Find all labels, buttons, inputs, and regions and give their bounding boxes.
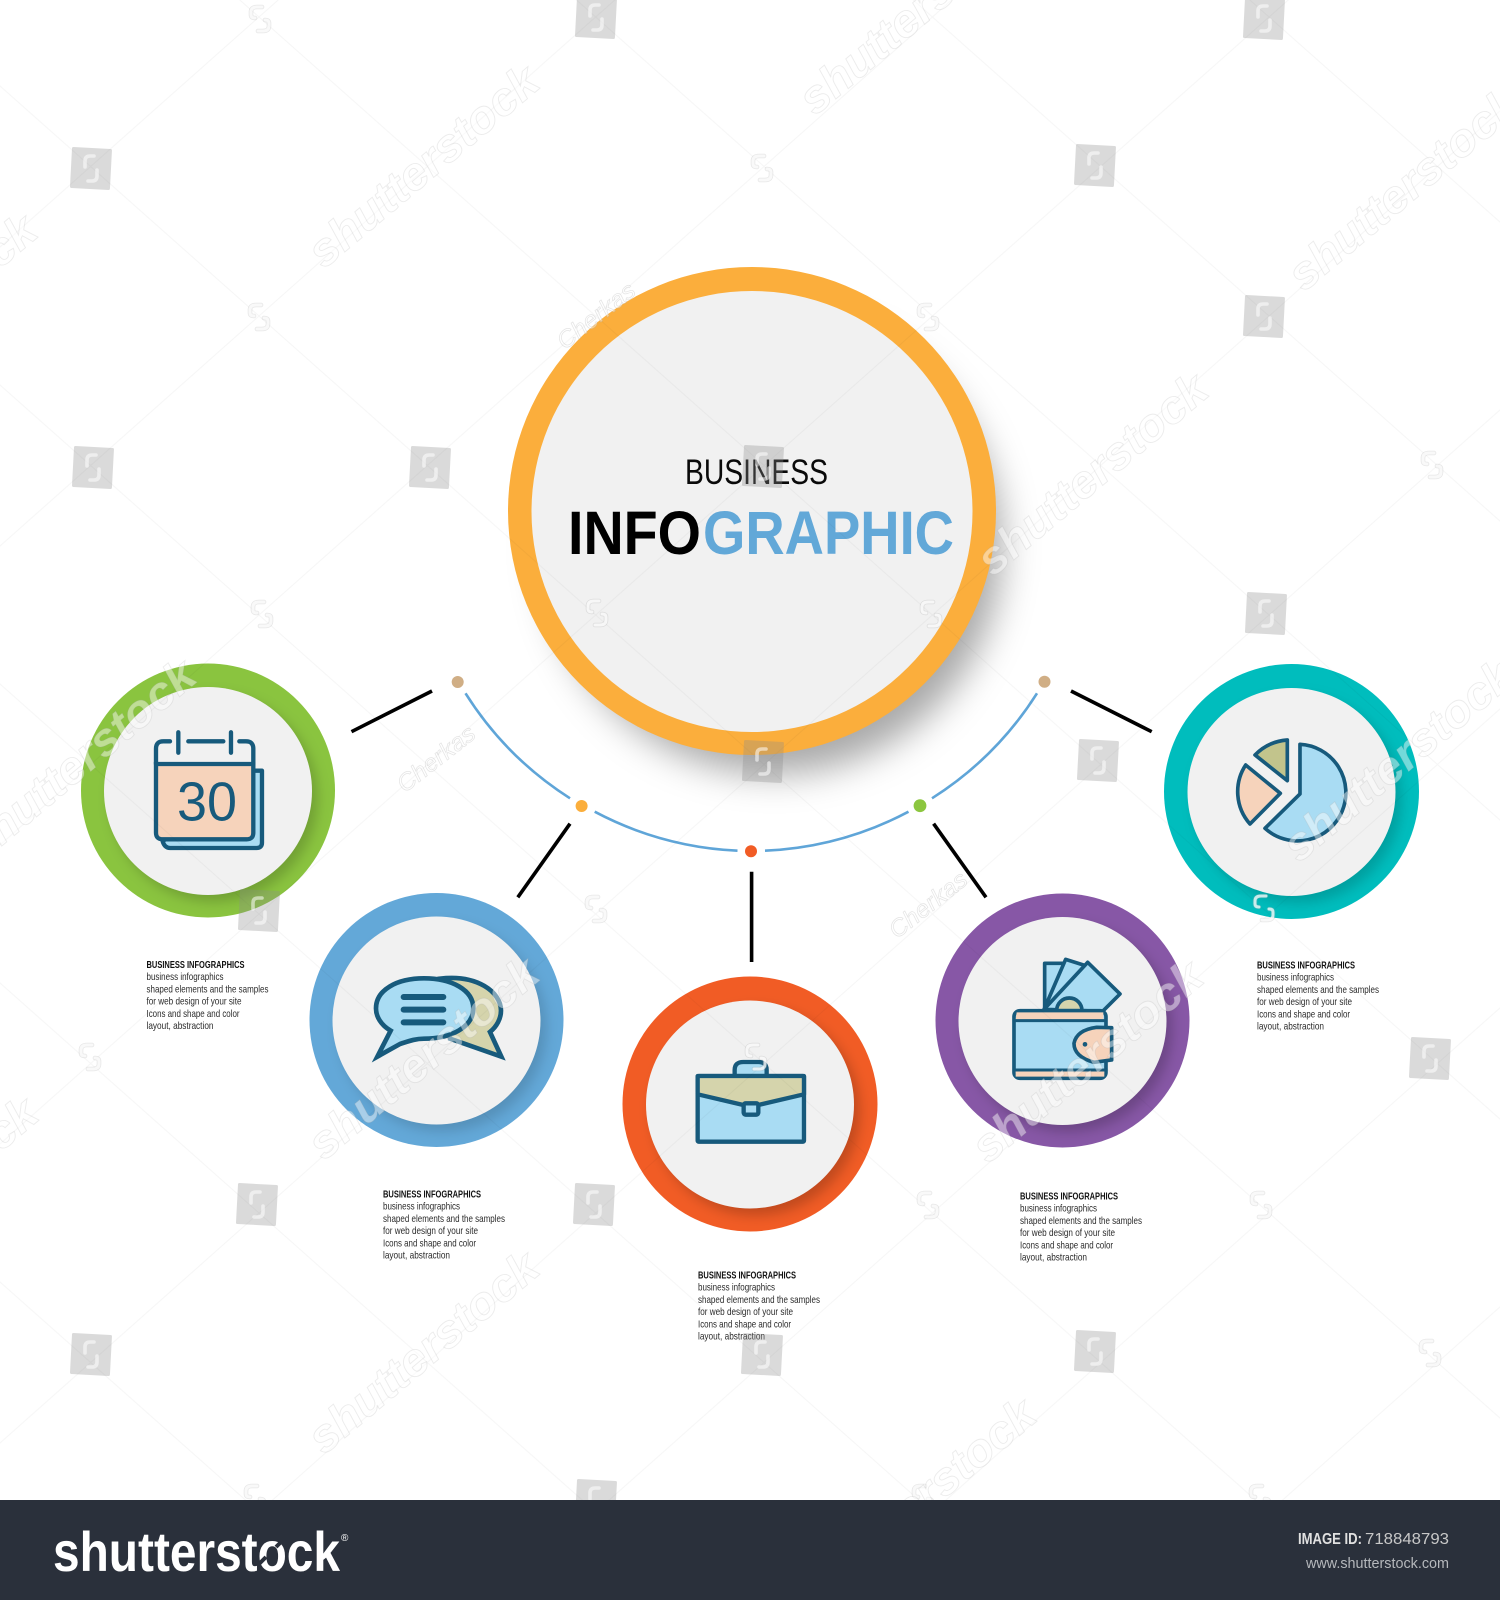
text block: briefcase: shaped elements and the samples bbox=[698, 1294, 820, 1306]
text block: calendar: BUSINESS INFOGRAPHICS bbox=[146, 959, 244, 971]
text block: wallet: BUSINESS INFOGRAPHICS bbox=[1020, 1190, 1118, 1202]
text block: wallet: business infographics bbox=[1020, 1203, 1097, 1215]
icon: wallet with banknotes bbox=[1014, 959, 1120, 1078]
watermark text: shutterstock bbox=[297, 53, 550, 277]
text block: briefcase: for web design of your site bbox=[698, 1306, 793, 1318]
text block: calendar: business infographics bbox=[146, 971, 224, 983]
text block: chat: business infographics bbox=[383, 1201, 460, 1213]
text block: chat: BUSINESS INFOGRAPHICS bbox=[383, 1188, 481, 1200]
text block: briefcase: Icons and shape and color bbox=[698, 1318, 791, 1330]
text block: briefcase: business infographics bbox=[698, 1282, 775, 1294]
title: infographic: INFO bbox=[568, 499, 701, 567]
watermark text: Cherkas bbox=[392, 720, 481, 798]
watermark text: shutterstock bbox=[966, 361, 1219, 585]
text block: chat: Icons and shape and color bbox=[383, 1237, 476, 1249]
text block: chat: shaped elements and the samples bbox=[383, 1213, 505, 1225]
text block: briefcase: BUSINESS INFOGRAPHICS bbox=[698, 1270, 796, 1282]
icon: speech bubbles bbox=[376, 978, 501, 1057]
panel: pie chart circle bbox=[1164, 664, 1419, 919]
text block: pie chart: shaped elements and the samples bbox=[1257, 984, 1379, 996]
watermark text: shutterstock bbox=[297, 1239, 550, 1463]
footer logo: shutterstock bbox=[53, 1520, 341, 1583]
panel: wallet circle bbox=[936, 894, 1190, 1148]
icon: calendar bbox=[156, 732, 262, 848]
text block: briefcase bbox=[698, 1270, 820, 1342]
connector arc bbox=[466, 693, 1037, 851]
text block: pie chart: layout, abstraction bbox=[1257, 1020, 1324, 1032]
text block: calendar: for web design of your site bbox=[146, 996, 242, 1008]
connector lines bbox=[352, 691, 1152, 962]
panel: briefcase circle bbox=[622, 976, 878, 1232]
text block: chat: for web design of your site bbox=[383, 1225, 478, 1237]
icon: pie chart bbox=[1238, 740, 1346, 841]
text block: pie chart: for web design of your site bbox=[1257, 996, 1352, 1008]
panel: calendar circle bbox=[81, 664, 335, 918]
text block: pie chart bbox=[1257, 960, 1379, 1032]
text block: pie chart: business infographics bbox=[1257, 972, 1334, 984]
watermark text: Cherkas bbox=[884, 866, 973, 944]
text block: calendar: layout, abstraction bbox=[146, 1020, 214, 1032]
title: business: BUSINESS bbox=[685, 453, 828, 492]
text block: pie chart: Icons and shape and color bbox=[1257, 1008, 1350, 1020]
text block: chat: layout, abstraction bbox=[383, 1250, 450, 1262]
watermark text: shutterstock bbox=[961, 948, 1214, 1172]
text block: calendar: shaped elements and the samples bbox=[146, 983, 268, 995]
text block: briefcase: layout, abstraction bbox=[698, 1330, 765, 1342]
image id: IMAGE ID: bbox=[1298, 1531, 1362, 1548]
website: www.shutterstock.com bbox=[1305, 1555, 1449, 1572]
text block: wallet bbox=[1020, 1190, 1142, 1264]
text block: wallet: shaped elements and the samples bbox=[1020, 1215, 1142, 1227]
text block: calendar: Icons and shape and color bbox=[146, 1008, 240, 1020]
text block: chat bbox=[383, 1188, 505, 1262]
footer bar bbox=[0, 1500, 1500, 1600]
arc nodes bbox=[452, 676, 1050, 857]
text block: calendar bbox=[146, 959, 268, 1032]
text block: wallet: Icons and shape and color bbox=[1020, 1239, 1113, 1251]
footer logo: ® bbox=[341, 1533, 349, 1544]
icon: briefcase bbox=[698, 1062, 804, 1142]
text block: pie chart: BUSINESS INFOGRAPHICS bbox=[1257, 960, 1355, 972]
panel: chat circle bbox=[310, 893, 564, 1147]
text block: wallet: for web design of your site bbox=[1020, 1227, 1115, 1239]
central circle bbox=[508, 267, 1002, 774]
icon: calendar: 30 bbox=[177, 771, 237, 833]
text block: wallet: layout, abstraction bbox=[1020, 1252, 1087, 1264]
watermark text: shutterstock bbox=[297, 945, 550, 1169]
title: infographic: GRAPHIC bbox=[703, 499, 954, 567]
watermark text: Cherkas bbox=[552, 277, 641, 355]
image id: 718848793 bbox=[1365, 1531, 1449, 1548]
